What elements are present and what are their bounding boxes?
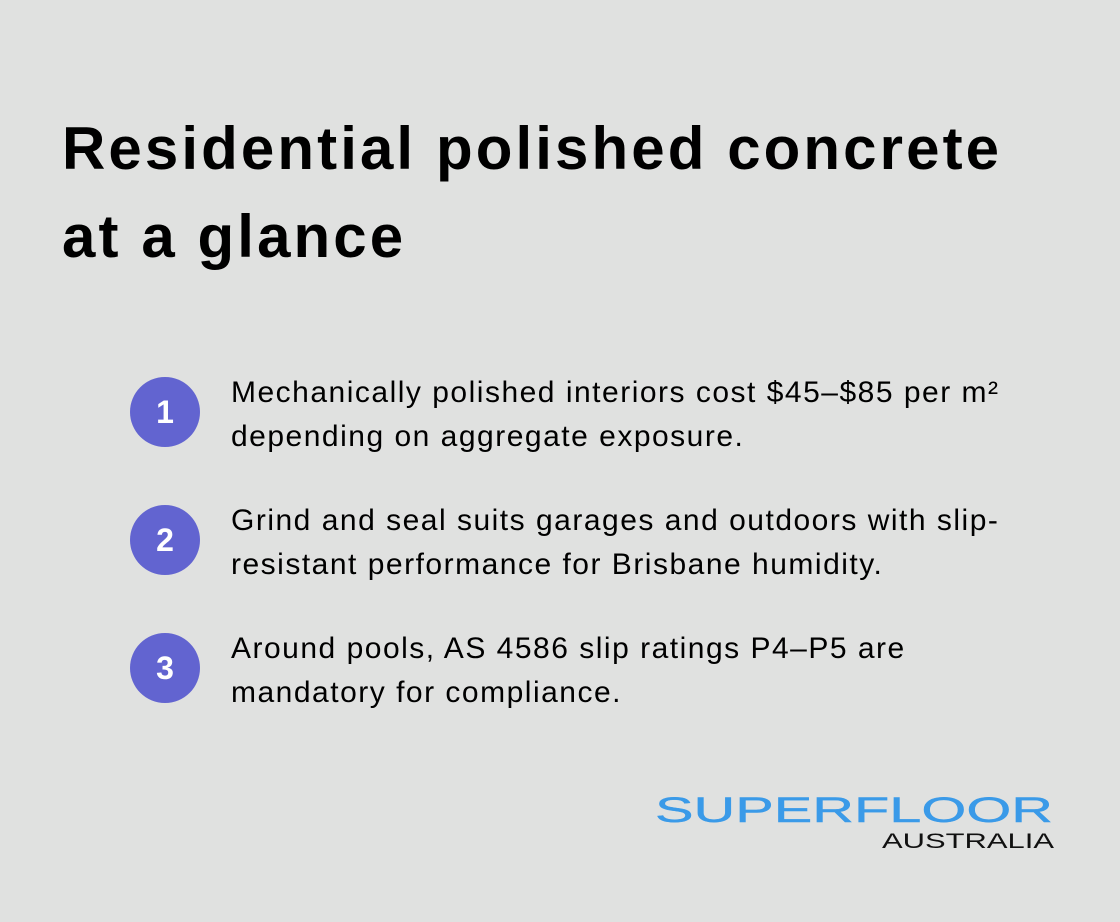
text 1: Mechanically polished interiors cost $45–$85 per m²	[231, 376, 1000, 409]
badge 2: 2	[156, 522, 174, 558]
logo: SUPERFLOOR	[655, 792, 1053, 830]
item 2	[130, 504, 999, 581]
text 2: Grind and seal suits garages and outdoors with slip-	[231, 504, 999, 537]
text 1: depending on aggregate exposure.	[231, 420, 744, 453]
badge 3	[130, 633, 200, 703]
badge 1: 1	[156, 394, 174, 430]
item 1	[130, 376, 1000, 453]
badge 3: 3	[156, 650, 174, 686]
badge 1	[130, 377, 200, 447]
title: at a glance	[62, 203, 406, 270]
text 2	[231, 504, 999, 581]
title: Residential polished concrete	[62, 115, 1002, 182]
text 1	[231, 376, 1000, 453]
text 3: mandatory for compliance.	[231, 676, 622, 709]
title	[62, 115, 1002, 270]
text 2: resistant performance for Brisbane humidity.	[231, 548, 883, 581]
item 3	[130, 632, 906, 709]
text 3	[231, 632, 906, 709]
badge 2	[130, 505, 200, 575]
text 3: Around pools, AS 4586 slip ratings P4–P5 are	[231, 632, 906, 665]
logo	[655, 792, 1054, 852]
